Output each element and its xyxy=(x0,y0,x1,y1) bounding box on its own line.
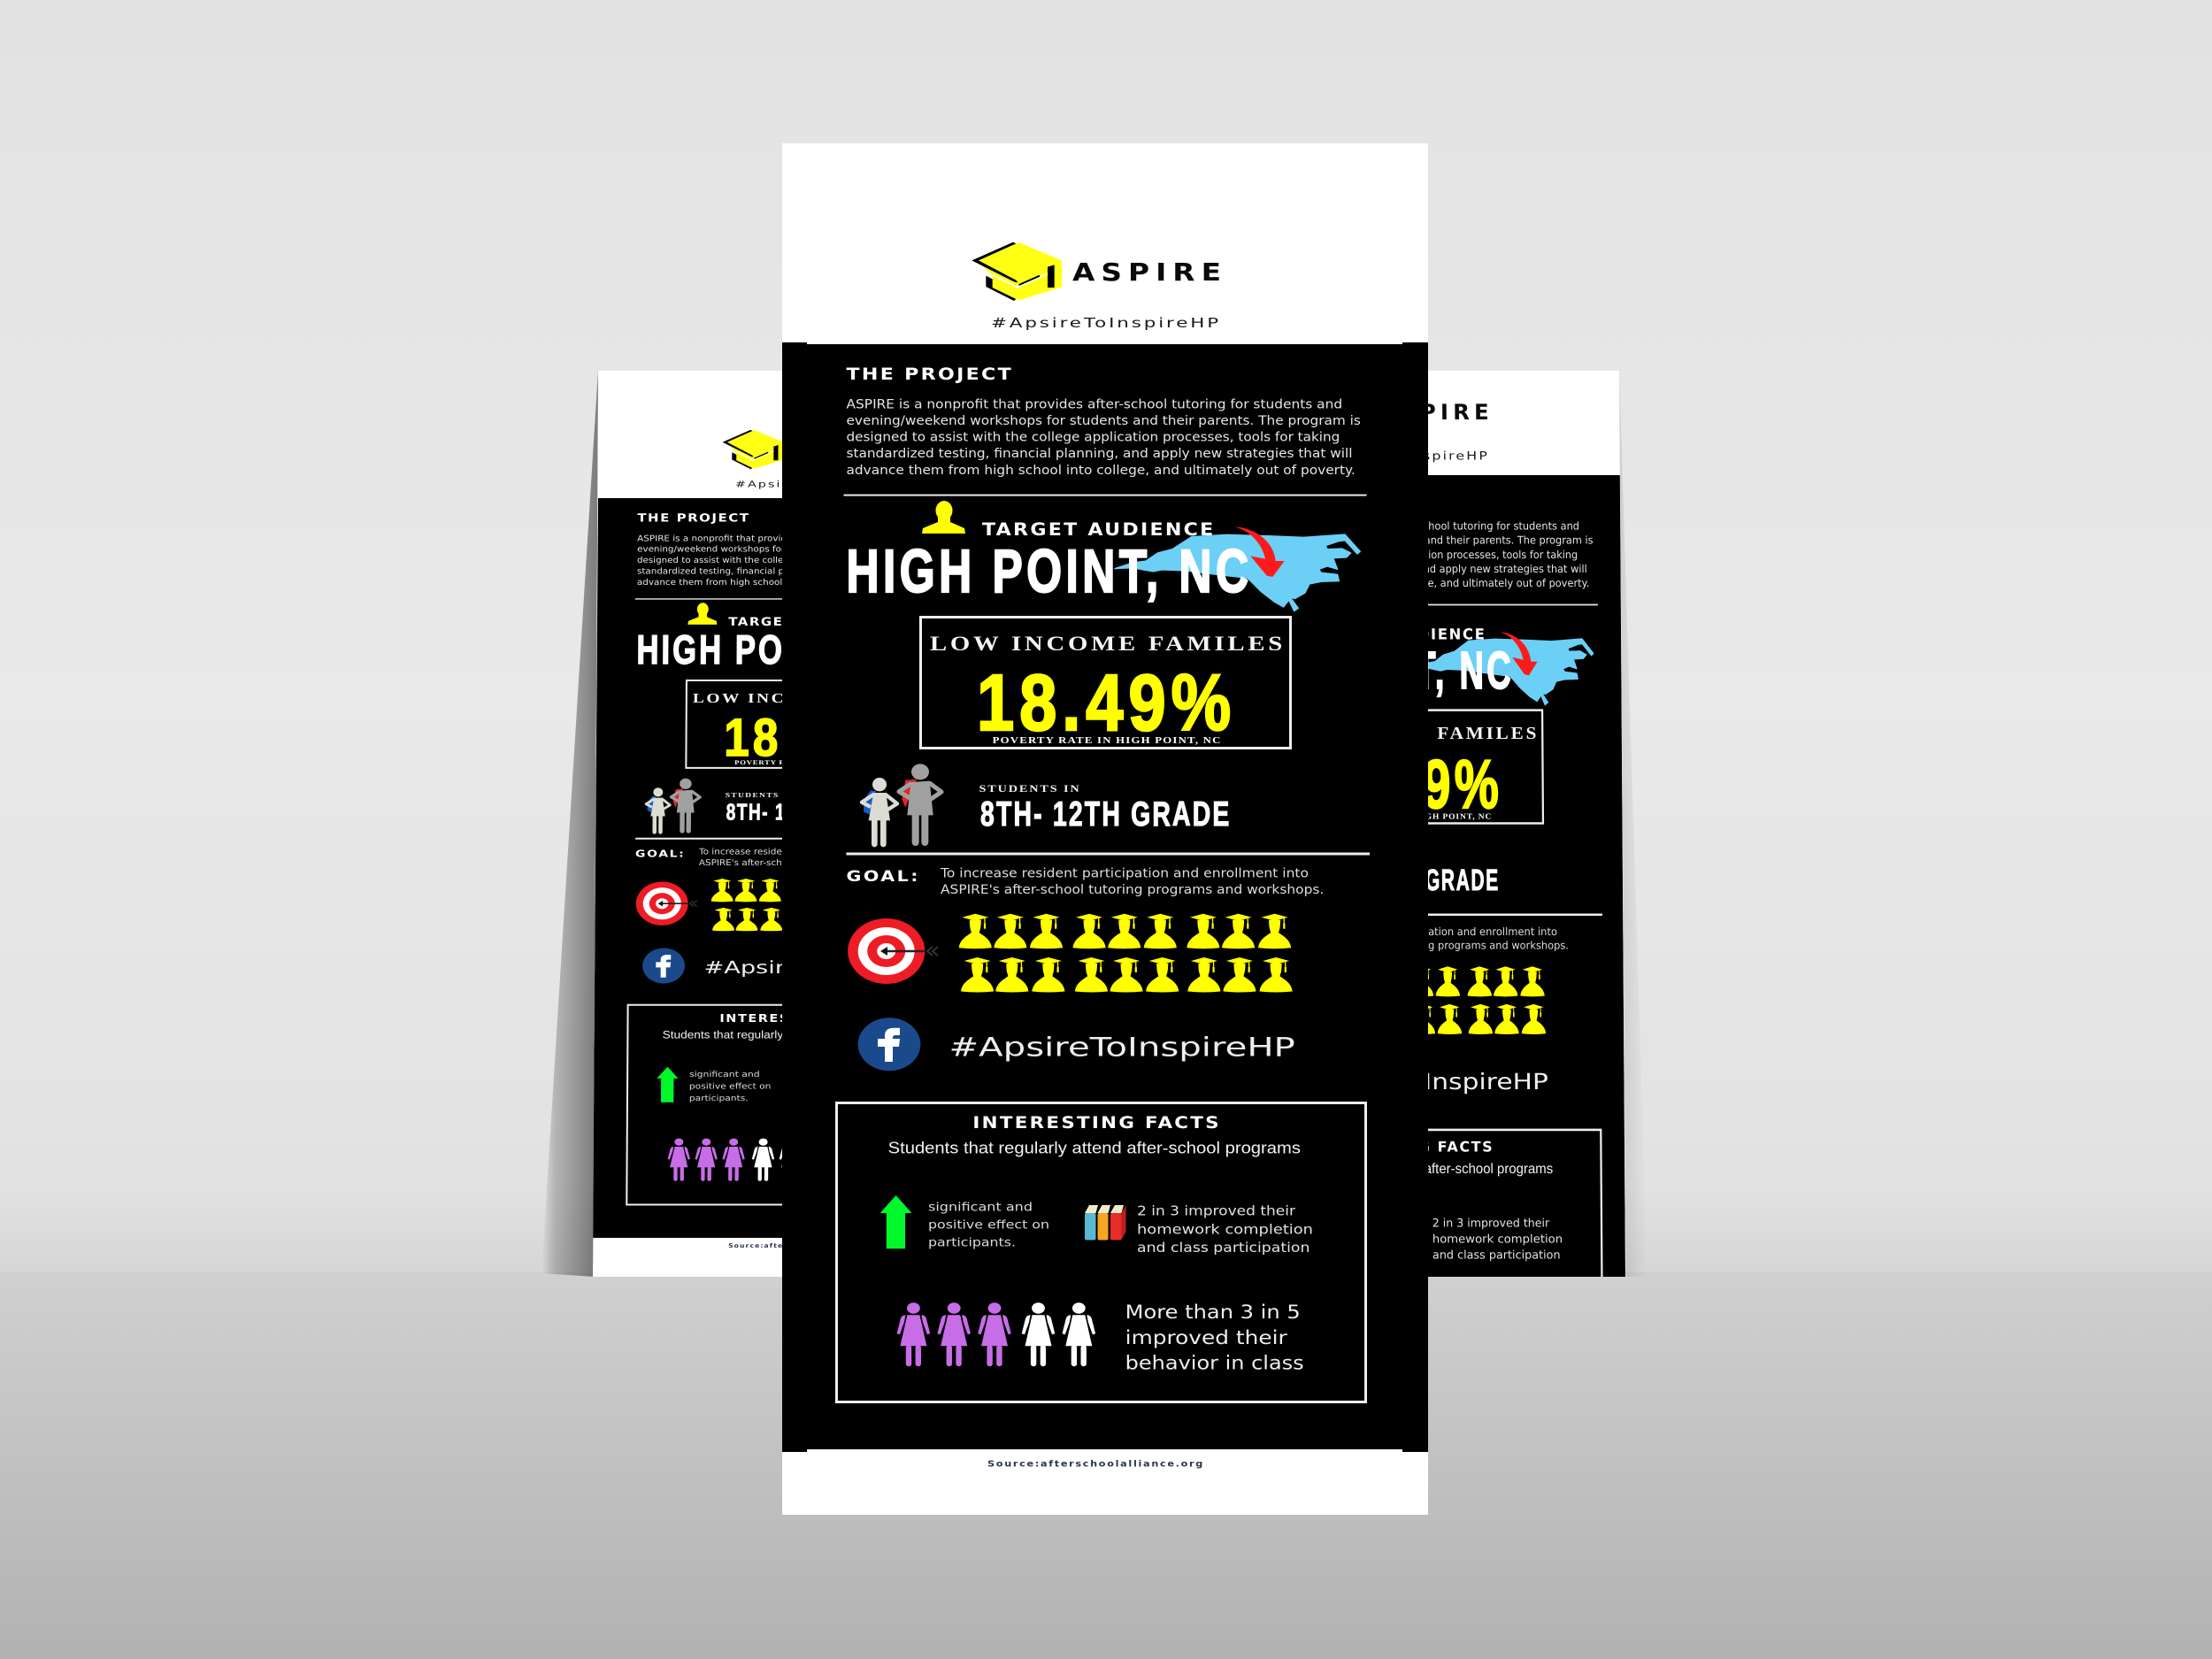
logo: graduation cap xyxy=(972,242,1062,301)
fact: homework xyxy=(1137,1202,1313,1256)
icon: person xyxy=(922,501,965,534)
wall background xyxy=(0,0,2212,1274)
project description: standardized testing, financial planning, and apply new strategies that will xyxy=(846,447,1352,461)
icon: students xyxy=(862,764,941,844)
project description xyxy=(846,398,1361,478)
goal text: To increase resident participation and enrollment into xyxy=(940,867,1309,881)
floor xyxy=(0,1272,2212,1659)
goal text xyxy=(940,867,1324,897)
goal label: GOAL: xyxy=(846,868,920,885)
heading: target audience: TARGET AUDIENCE xyxy=(982,519,1216,540)
fact: positive effect: significant and xyxy=(928,1200,1033,1214)
arrow: red down xyxy=(1234,526,1285,577)
label: students in: STUDENTS IN xyxy=(979,784,1081,795)
pictogram: 3 of 5 women xyxy=(897,1302,1095,1366)
left background poster xyxy=(593,371,782,1277)
heading: High Point, NC: HIGH POINT, NC xyxy=(846,537,1253,605)
fact: homework: and class participation xyxy=(1137,1240,1310,1256)
stat label: LOW INCOME FAMILES xyxy=(930,633,1286,655)
project description: evening/weekend workshops for students and their parents. The program is xyxy=(846,414,1361,428)
logo wordmark: ASPIRE xyxy=(1072,257,1227,287)
right background poster xyxy=(1428,371,1625,1277)
heading: the project: THE PROJECT xyxy=(846,365,1013,384)
fact: positive effect: positive effect on xyxy=(928,1217,1049,1232)
stat caption: POVERTY RATE IN HIGH POINT, NC xyxy=(993,736,1222,746)
stat value: 18.49% xyxy=(977,659,1236,748)
source line: Source:afterschoolalliance.org xyxy=(987,1459,1204,1469)
fact: behaviour xyxy=(1125,1302,1304,1374)
icon: facebook xyxy=(858,1018,920,1071)
map: North Carolina xyxy=(1115,534,1360,611)
icon: target with arrow xyxy=(848,918,938,984)
fact: homework: homework completion xyxy=(1137,1221,1313,1237)
hashtag: #ApsireToInspireHP xyxy=(949,1032,1295,1062)
goal graduates pictogram xyxy=(959,914,1293,993)
heading: grade range: 8TH- 12TH GRADE xyxy=(980,795,1232,833)
panel: interesting facts xyxy=(837,1102,1366,1402)
poster black panel xyxy=(782,342,1428,1452)
front poster xyxy=(782,143,1428,1515)
facts heading: INTERESTING FACTS xyxy=(972,1114,1221,1133)
right card shadow xyxy=(1619,371,1647,1277)
hashtag header: #ApsireToInspireHP xyxy=(991,315,1221,331)
icon: books xyxy=(1085,1205,1126,1240)
arrow: green up xyxy=(880,1195,911,1248)
left card shadow xyxy=(541,371,598,1277)
project description: designed to assist with the college application processes, tools for taking xyxy=(846,431,1340,445)
fact: behaviour: improved their xyxy=(1125,1327,1287,1348)
poster paper xyxy=(782,143,1428,1515)
fact: positive effect xyxy=(928,1200,1049,1250)
fact: behaviour: More than 3 in 5 xyxy=(1125,1302,1301,1323)
stat box: low income families xyxy=(920,618,1290,749)
project description: advance them from high school into college, and ultimately out of poverty. xyxy=(846,464,1356,478)
project description: ASPIRE is a nonprofit that provides after-school tutoring for students and xyxy=(846,398,1342,412)
goal text: ASPIRE's after-school tutoring programs and workshops. xyxy=(941,883,1324,897)
fact: homework: 2 in 3 improved their xyxy=(1137,1202,1296,1218)
fact: behaviour: behavior in class xyxy=(1125,1353,1304,1374)
fact: positive effect: participants. xyxy=(928,1236,1016,1250)
facts subheading: Students that regularly attend after-school programs xyxy=(888,1138,1301,1156)
